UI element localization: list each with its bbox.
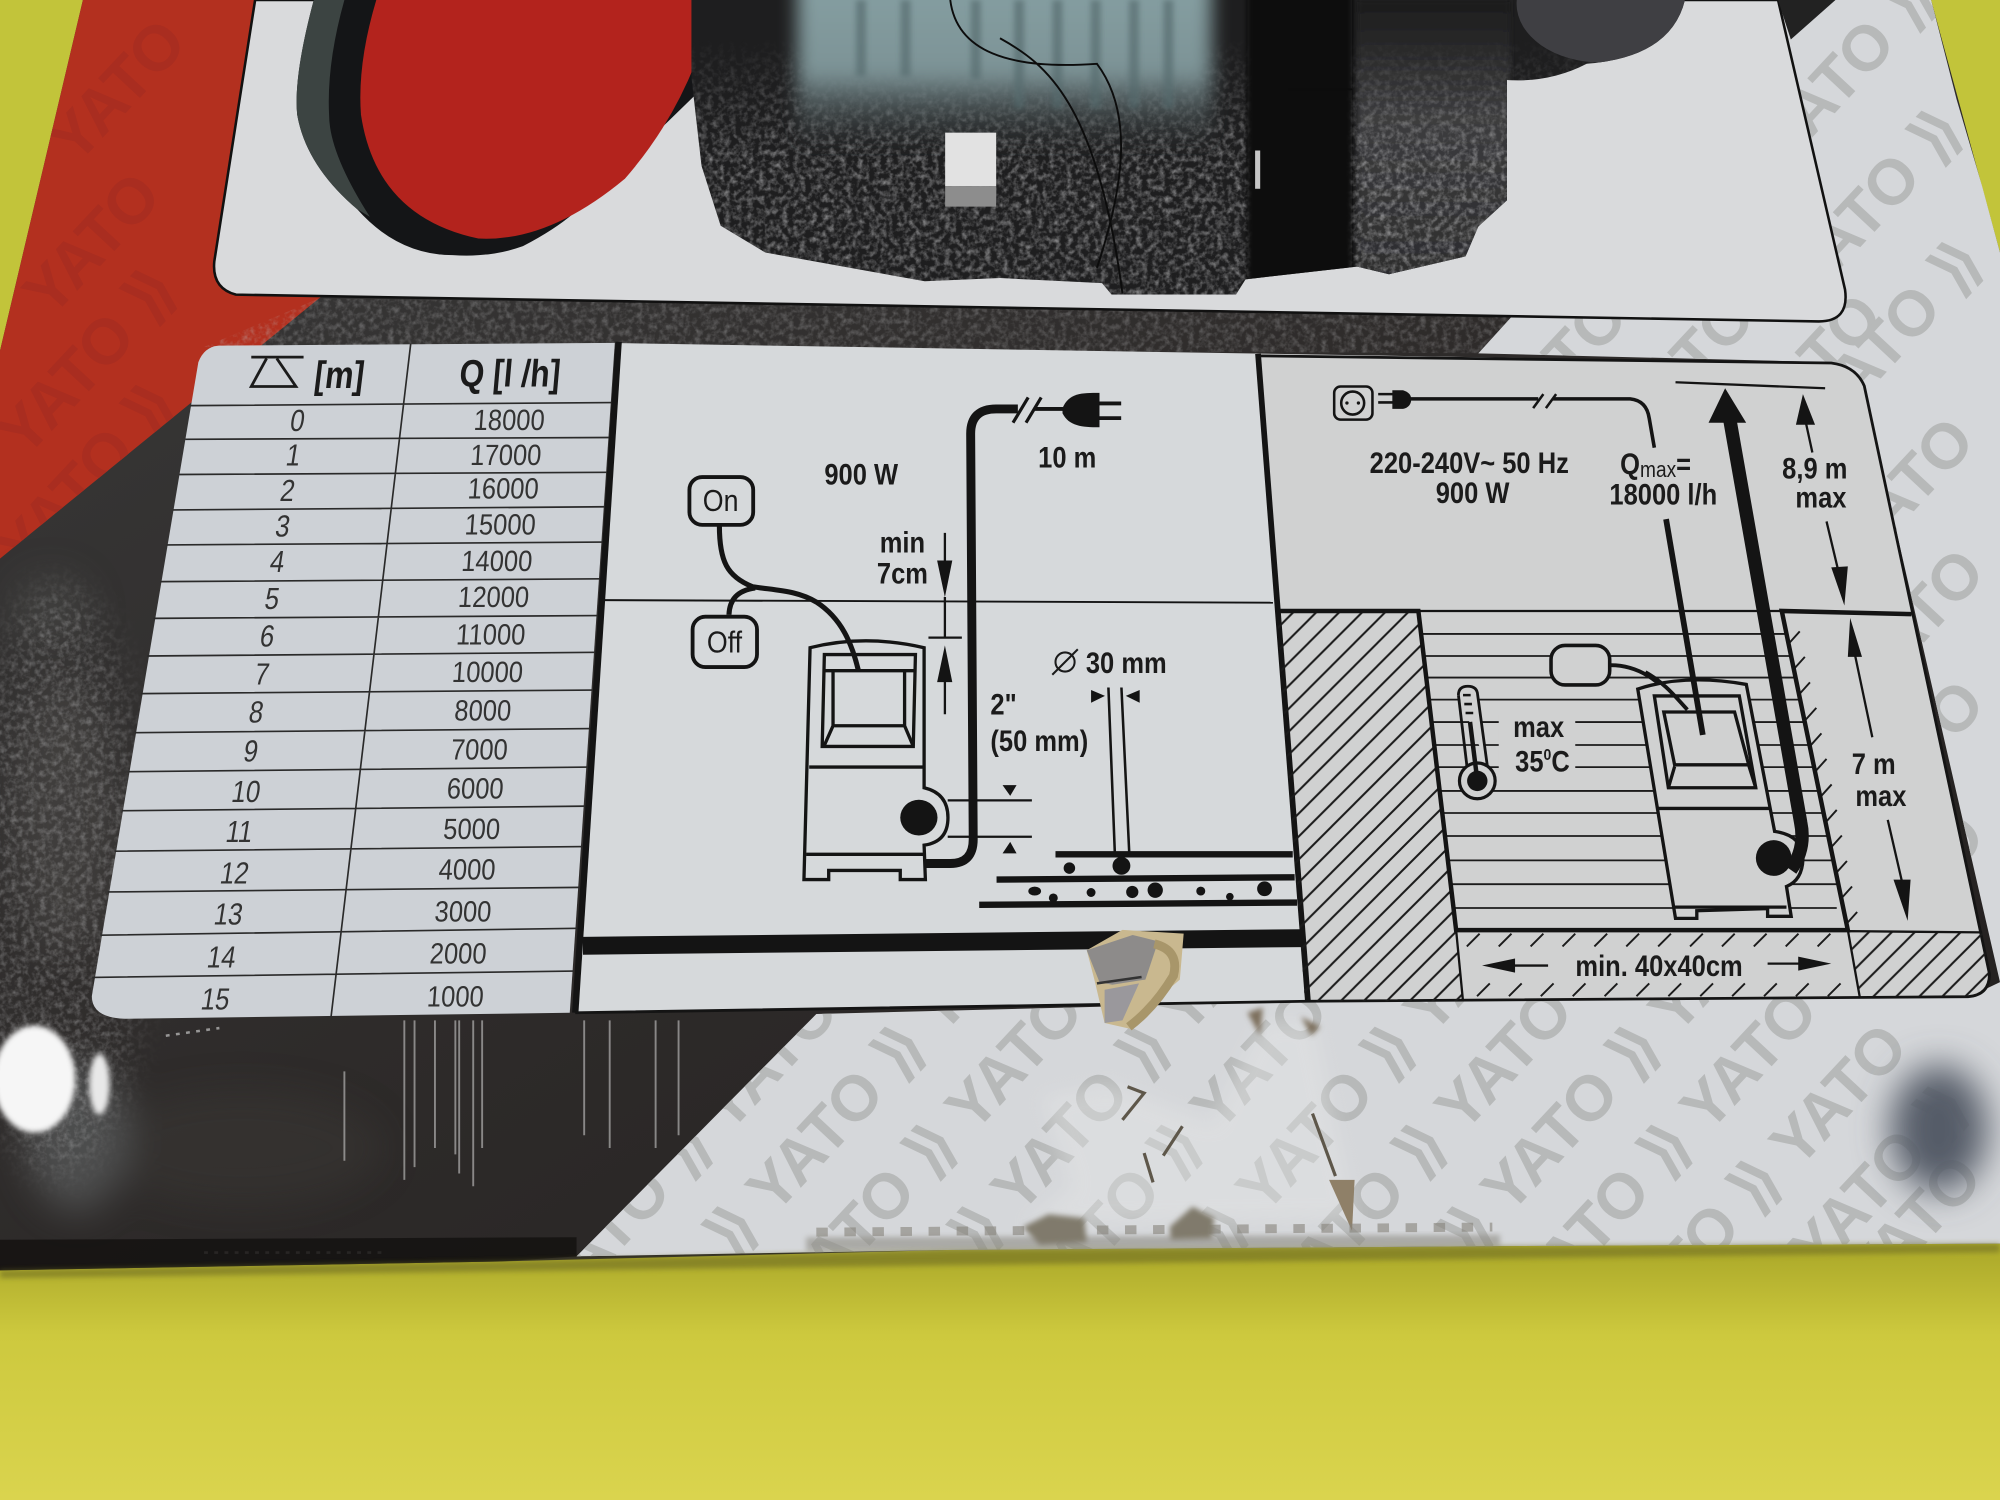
table row lines [92, 344, 613, 1017]
temperature label: 0 [1544, 746, 1551, 764]
column: flow values: 12000 [457, 580, 530, 613]
float switch [1551, 645, 1687, 710]
column: head values: 9 [241, 735, 261, 769]
grey YATO patterned area: YATO ⟫ [1769, 93, 1978, 309]
cable and float lead over the pump [1645, 672, 1687, 710]
column: head values: 5 [262, 582, 282, 617]
column: head values: 12 [218, 856, 251, 891]
column: head values: 0 [288, 404, 307, 439]
column: head values: 8 [246, 696, 266, 730]
temperature label [1499, 711, 1575, 781]
float switch cable [719, 526, 858, 670]
grey YATO patterned area: YATO ⟫ YATO [519, 974, 852, 1323]
table header: flow: Q [l /h] [458, 353, 562, 395]
table header: metres: [m] [312, 354, 367, 396]
grey YATO patterned area: YATO [1822, 403, 1988, 573]
voltage label: 220-240V~ 50 Hz [1370, 447, 1569, 480]
panel: submerged installation [1277, 382, 1989, 1001]
speckle under top panel [204, 296, 1531, 355]
red band YATO pattern: YATO [34, 5, 200, 175]
column: head values: 6 [257, 620, 277, 654]
column: head values: 10 [229, 775, 263, 810]
grey YATO patterned area: YATO ⟫ YATO ⟫ YATO [1299, 876, 1800, 1405]
outlet size label: (50 mm) [990, 724, 1088, 757]
left wall hatching [1277, 611, 1463, 1001]
grey YATO patterned area: YATO ⟫ YATO [1498, 974, 1831, 1323]
max flow label: = [1676, 447, 1691, 481]
column: flow values: 1000 [426, 980, 485, 1013]
floor hatching [1467, 934, 1841, 996]
min water level label: 7cm [877, 557, 928, 590]
grey YATO patterned area: YATO ⟫ YATO ⟫ YATO [810, 876, 1310, 1405]
minimum pit size label: min. 40x40cm [1575, 949, 1743, 982]
column: flow values: 4000 [438, 853, 497, 886]
column: flow values: 18000 [473, 403, 546, 436]
grey YATO patterned area: YATO ⟫ [1775, 1068, 1984, 1285]
panel outlines [575, 342, 1989, 1013]
column: flow values: 15000 [464, 508, 537, 541]
socket and mains plug [1334, 386, 1654, 448]
delivery head label: max [1795, 481, 1847, 514]
red hose connector disc [297, 0, 714, 256]
column: head values: 11 [223, 815, 255, 849]
column: flow values [426, 403, 546, 1013]
dark band along box bottom edge [0, 1237, 577, 1270]
column: head values: 2 [278, 474, 297, 508]
grey YATO patterned area: YATO [1830, 1140, 1995, 1311]
min water level label: min [880, 526, 925, 559]
column: flow values: 16000 [467, 472, 540, 505]
grey YATO patterned area: YATO [1475, 280, 1641, 450]
grey YATO patterned area: YATO [1833, 799, 1998, 969]
submersion depth label: max [1855, 779, 1907, 813]
min water level label [877, 526, 962, 714]
discharge hose and plug [926, 393, 1121, 864]
on switch label: On [703, 484, 739, 518]
column: head values: 15 [199, 983, 232, 1017]
temperature label: max [1513, 711, 1565, 744]
column: head values: 1 [284, 439, 303, 473]
voltage label: 900 W [1436, 476, 1509, 509]
column: flow values: 2000 [429, 937, 488, 970]
column: head values: 3 [273, 510, 293, 544]
pump outline [804, 641, 948, 880]
column: flow values: 7000 [450, 733, 509, 766]
column: flow values: 8000 [453, 694, 512, 727]
grey YATO patterned area: YATO [1833, 666, 1998, 836]
right wall ticks [1788, 631, 1857, 925]
red band YATO pattern: YATO [9, 158, 174, 328]
right ground hatching [1849, 932, 1989, 996]
delivery arrow [1676, 382, 1825, 870]
max flow label: Q [1620, 447, 1640, 481]
installation panels background [577, 343, 1989, 1012]
grey YATO patterned area: YATO [1833, 535, 1998, 705]
column: flow values: 11000 [455, 618, 527, 651]
plastic wrap glare [0, 1020, 679, 1253]
max flow label [1609, 447, 1717, 735]
top product panel with pump photo [214, 0, 1846, 321]
column: flow values: 6000 [446, 772, 505, 805]
column: flow values: 14000 [460, 544, 533, 577]
performance table [92, 343, 615, 1019]
off switch label [693, 617, 757, 667]
temperature label: C [1551, 745, 1570, 778]
submersion depth label [1848, 618, 1911, 921]
pit walls [1277, 611, 1911, 930]
right panel tone [1258, 354, 1989, 1001]
grey YATO patterned area: YATO ⟫ YATO ⟫ YATO [565, 876, 1065, 1405]
speckle on dark areas [0, 576, 147, 1179]
delivery head label [1782, 394, 1848, 605]
off switch label: Off [707, 626, 743, 660]
pump body photo [676, 0, 1696, 306]
ground layers with pebbles [979, 854, 1297, 905]
max flow label: 18000 l/h [1609, 478, 1717, 511]
column: head values: 4 [268, 545, 287, 579]
delivery head label: 8,9 m [1782, 452, 1847, 485]
panel: usage with hose [689, 393, 1297, 905]
cable length label: 10 m [1038, 441, 1096, 474]
grey YATO patterned area: YATO [1731, 280, 1896, 450]
pump outline [1638, 680, 1803, 918]
power label: 900 W [824, 458, 898, 491]
thermometer icon [1458, 686, 1495, 799]
water level lines [1403, 634, 1837, 908]
mottled dark texture [13, 574, 383, 1212]
outlet size label [948, 688, 1088, 853]
grey YATO patterned area: YATO ⟫ YATO [764, 974, 1097, 1323]
particle size label: 30 mm [1086, 646, 1167, 679]
particle size label [1052, 646, 1167, 852]
grey YATO patterned area: YATO ⟫ YATO ⟫ YATO [1055, 876, 1555, 1405]
column: flow values: 10000 [451, 656, 524, 689]
grey YATO patterned area: ⟫ YATO ⟫ YATO [1546, 1010, 1921, 1405]
grey YATO patterned area [576, 0, 2000, 1256]
outlet size label: 2" [990, 688, 1017, 721]
grey YATO patterned area: YATO [1603, 280, 1768, 450]
temperature label: 35 [1515, 745, 1544, 778]
dark corner at top of panel [1778, 0, 1835, 40]
column: head values: 7 [252, 657, 272, 692]
column: head values: 14 [205, 940, 238, 975]
grey YATO patterned area: YATO ⟫ YATO [1009, 974, 1342, 1323]
red corner band [0, 0, 383, 559]
table header: head symbol [251, 357, 304, 386]
submersion depth label: 7 m [1852, 747, 1896, 780]
damage: punctured hole [1087, 930, 1184, 1029]
minimum pit size label [1482, 949, 1831, 982]
column: flow values: 5000 [442, 812, 501, 845]
column: head values [199, 404, 307, 1017]
damage: torn paper at the bottom [806, 1008, 1500, 1251]
column: flow values: 17000 [469, 438, 543, 471]
on switch label [689, 477, 753, 525]
box bottom shadow [0, 1244, 2000, 1278]
column: flow values: 3000 [434, 895, 493, 928]
grey YATO patterned area: YATO ⟫ YATO [1253, 974, 1586, 1323]
grey YATO patterned area: YATO ⟫ [1789, 224, 1998, 441]
red band YATO pattern [0, 25, 179, 548]
max flow label: max [1640, 458, 1677, 482]
voltage label [1370, 447, 1569, 509]
column: head values: 13 [212, 898, 245, 932]
